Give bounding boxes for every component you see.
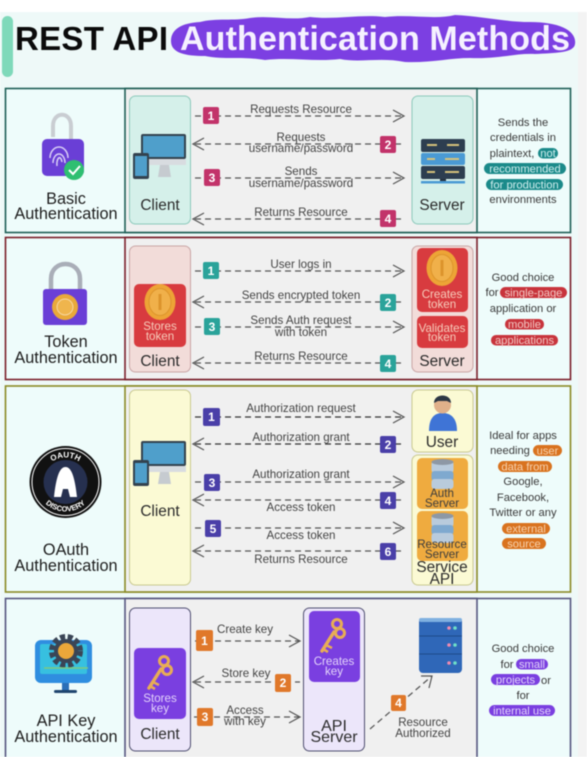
- flow step 3: with key: [223, 715, 266, 728]
- note: basic: [484, 117, 566, 206]
- note: oauth: external: [506, 524, 546, 536]
- method name: [14, 190, 118, 223]
- flow step 3: 3: [209, 320, 216, 334]
- client box: Client: [140, 197, 180, 214]
- flow step 2: 2: [385, 296, 392, 310]
- flow step 4: Access token: [267, 501, 335, 514]
- note: api key: or: [541, 675, 551, 687]
- icon: database: [419, 618, 462, 673]
- method name: API Key: [37, 712, 96, 730]
- flow step 3: Authorization grant: [252, 468, 350, 481]
- flow step 2: 2: [280, 676, 287, 690]
- api server box: key: [325, 665, 343, 678]
- method name: [14, 712, 118, 746]
- note: api key: internal use: [493, 706, 551, 718]
- flow step 4: [370, 676, 451, 740]
- note: api key: Good choice: [492, 643, 554, 655]
- note: token: for: [485, 287, 499, 299]
- client box: [130, 390, 190, 585]
- api server box: Server: [310, 729, 358, 746]
- flow step 1: 1: [208, 410, 215, 424]
- note: api key: small: [519, 659, 545, 671]
- flow step 1: 1: [208, 264, 215, 278]
- api server box: [304, 608, 364, 751]
- icon: oauth discovery badge: [28, 445, 102, 519]
- flow step 2: [193, 667, 300, 692]
- flow step 3: [195, 314, 404, 339]
- note: basic: plaintext,: [490, 148, 534, 160]
- flow step 6: Returns Resource: [254, 553, 348, 566]
- auth server: [417, 458, 468, 510]
- note: token: single-page: [505, 288, 562, 300]
- server box: [412, 96, 473, 224]
- service api box: API: [430, 571, 454, 588]
- note: oauth: Twitter or any: [489, 507, 557, 519]
- flow step 1: [195, 258, 404, 279]
- note: oauth: data from: [501, 462, 549, 474]
- note: basic: recommended: [489, 164, 561, 176]
- note: token: applications: [495, 335, 554, 347]
- client box: Client: [140, 503, 180, 520]
- flow step 2: [193, 289, 403, 311]
- flow step 5: Access token: [267, 529, 335, 542]
- accent bar: [2, 16, 13, 77]
- user box: [412, 390, 473, 452]
- note: oauth: Ideal for apps: [489, 430, 557, 442]
- api server box: API: [321, 718, 347, 735]
- client box: Client: [140, 353, 180, 370]
- flow step 2: Store key: [222, 667, 271, 680]
- flow step 3: username/password: [249, 177, 353, 190]
- method name: Authentication: [14, 728, 118, 746]
- flow step 2: Sends encrypted token: [242, 289, 360, 302]
- note: api key: [489, 643, 555, 718]
- flow step 2: [193, 131, 403, 155]
- flow step 3: Sends Auth request: [250, 314, 352, 327]
- flow step 5: [195, 520, 404, 542]
- flow step 6: 6: [385, 545, 392, 559]
- flow step 4: 4: [385, 212, 392, 226]
- service api box: Service: [416, 559, 468, 576]
- method name: Token: [44, 333, 88, 351]
- flow step 4: Resource: [398, 716, 448, 729]
- flow step 4: Returns Resource: [254, 350, 348, 363]
- flow step 4: [193, 206, 403, 227]
- title text: REST API: REST API: [15, 20, 168, 57]
- note: api key: for: [516, 690, 530, 702]
- client box: [130, 246, 190, 372]
- note: basic: environments: [489, 194, 557, 206]
- flow step 2: username/password: [249, 142, 353, 155]
- resource server: [417, 511, 468, 561]
- panel: api key authentication: [6, 598, 570, 757]
- note: basic: for production: [490, 180, 559, 192]
- flow step 3: Access: [226, 704, 264, 717]
- flow step 3: 3: [202, 710, 209, 724]
- server box: token: [428, 298, 456, 311]
- method name: Authentication: [14, 557, 118, 575]
- title: [2, 15, 575, 77]
- client box: [130, 96, 190, 224]
- method name: Authentication: [14, 205, 118, 223]
- panel: oauth authentication: [4, 384, 572, 594]
- flow step 4: Authorized: [395, 727, 451, 740]
- client box: [130, 608, 190, 751]
- flow step 2: [193, 431, 403, 453]
- flow step 4: [193, 492, 403, 514]
- flow step 3: [194, 704, 300, 728]
- flow step 1: 1: [208, 109, 215, 123]
- client box: key: [151, 702, 169, 715]
- note: token: application or: [490, 303, 557, 315]
- flow step 4: 4: [395, 696, 402, 710]
- flow step 1: Requests Resource: [250, 103, 352, 116]
- note: oauth: needing: [490, 445, 530, 457]
- note: oauth: source: [507, 538, 541, 550]
- flow step 4: 4: [385, 494, 392, 508]
- title highlight blob: [171, 15, 575, 62]
- flow step 6: [193, 543, 403, 566]
- flow step 3: with token: [274, 326, 327, 339]
- flow step 1: [195, 103, 404, 124]
- auth server: Server: [425, 497, 459, 510]
- flow step 3: Sends: [285, 165, 318, 178]
- flow step 3: 3: [209, 476, 216, 490]
- title text: Authentication Methods: Authentication Methods: [180, 20, 570, 58]
- flow step 3: 3: [209, 171, 216, 185]
- resource server: Server: [425, 548, 459, 561]
- server box: Creates: [422, 288, 462, 301]
- server box: Validates: [419, 322, 466, 335]
- resource server: Resource: [417, 538, 467, 551]
- method name: [14, 333, 118, 367]
- icon: oauth discovery badge: DISCOVERY: [45, 499, 84, 512]
- panel: token authentication: [6, 238, 570, 380]
- client box: Stores: [143, 320, 177, 333]
- flow step 2: 2: [385, 138, 392, 152]
- flow step 4: Returns Resource: [254, 206, 348, 219]
- panel: basic authentication: [6, 88, 570, 232]
- flow step 1: User logs in: [270, 258, 332, 271]
- client box: Client: [140, 726, 180, 743]
- flow step 3: [195, 468, 404, 491]
- note: oauth: [489, 430, 562, 550]
- flow step 4: [193, 350, 403, 372]
- server box: Server: [419, 197, 465, 214]
- client box: token: [146, 330, 174, 343]
- note: token: [485, 272, 567, 347]
- note: oauth: Facebook,: [497, 492, 549, 504]
- flow step 2: Requests: [277, 131, 326, 144]
- note: api key: for: [500, 659, 514, 671]
- method name: Authentication: [14, 349, 118, 367]
- flow step 4: 4: [385, 357, 392, 371]
- flow step 3: [195, 165, 404, 190]
- server box: Server: [419, 353, 465, 370]
- auth server: Auth: [430, 487, 454, 500]
- note: oauth: Google,: [503, 476, 543, 488]
- note: basic: Sends the: [498, 117, 548, 129]
- api server box: Creates: [314, 655, 354, 668]
- note: token: Good choice: [492, 272, 554, 284]
- server box: [412, 246, 473, 372]
- server box: token: [428, 331, 456, 344]
- note: basic: not: [540, 148, 557, 160]
- icon: open padlock: [42, 115, 84, 180]
- icon: oauth discovery badge: OAUTH: [50, 451, 82, 462]
- flow step 1: Authorization request: [246, 402, 357, 415]
- icon: user: [429, 396, 457, 431]
- note: api key: projects: [496, 674, 535, 686]
- note: oauth: user: [537, 446, 559, 458]
- flow step 2: Authorization grant: [252, 431, 350, 444]
- icon: token padlock: [43, 264, 87, 325]
- service api box: [412, 455, 473, 588]
- flow step 1: 1: [201, 634, 208, 648]
- method name: OAuth: [43, 541, 89, 559]
- icon: server: [421, 139, 465, 184]
- icon: api monitor with gear: [35, 637, 92, 693]
- user box: User: [426, 434, 458, 451]
- flow step 2: 2: [385, 438, 392, 452]
- flow step 5: 5: [210, 522, 217, 536]
- method name: [14, 541, 118, 575]
- flow step 1: [195, 402, 404, 426]
- note: token: mobile: [508, 319, 541, 331]
- note: basic: credentials in: [490, 132, 556, 144]
- client box: Stores: [143, 692, 177, 705]
- flow step 1: [195, 623, 300, 651]
- flow step 1: Create key: [217, 623, 273, 636]
- method name: Basic: [46, 190, 86, 208]
